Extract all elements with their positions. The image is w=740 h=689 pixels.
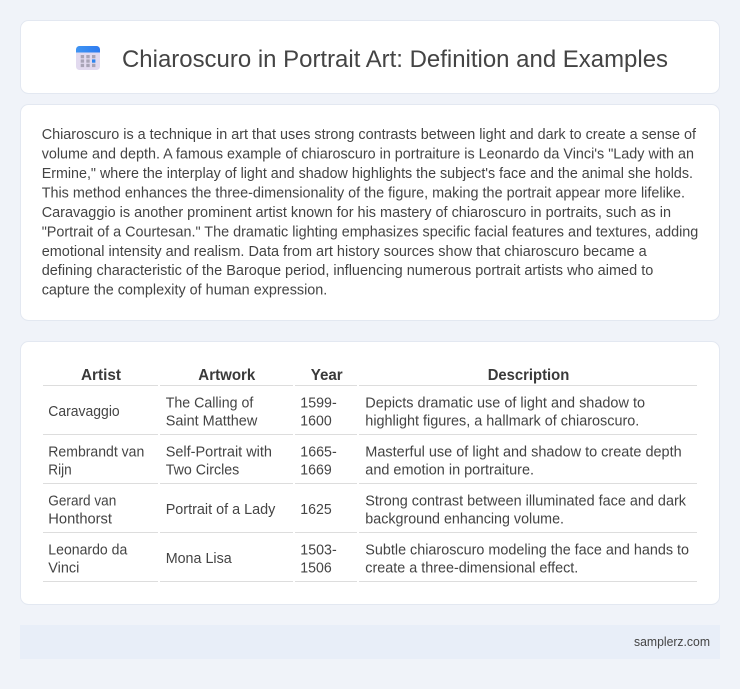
panel: introduction text <box>20 104 720 320</box>
footer bar <box>20 625 720 659</box>
table row: Rembrandt van Rijn: Self-Portrait with <box>166 444 272 460</box>
table row: Gerard van Honthorst <box>43 493 697 533</box>
table row: Leonardo da Vinci: 1506 <box>300 560 332 576</box>
table row: Rembrandt van Rijn: Two Circles <box>166 462 239 478</box>
panel: artists table <box>20 342 720 604</box>
table header row: Year <box>311 367 343 384</box>
table row: Rembrandt van Rijn <box>43 444 697 484</box>
table row: Gerard van Honthorst: Strong contrast between illuminated face and dark <box>365 493 687 509</box>
text block: description paragraph: Caravaggio is another prominent artist known for his mastery of chiaroscuro in portraits, such as in <box>42 204 671 221</box>
table row: Gerard van Honthorst: 1625 <box>300 502 332 518</box>
footer bar: samplerz.com <box>634 635 710 649</box>
table row: Leonardo da Vinci: create a three-dimensional effect. <box>365 560 578 576</box>
icon: calendar <box>76 46 100 70</box>
table row: Leonardo da Vinci <box>43 542 697 582</box>
table row: Leonardo da Vinci: Vinci <box>48 560 79 576</box>
table row: Gerard van Honthorst: Portrait of a Lady <box>166 502 276 518</box>
table row: Rembrandt van Rijn: Rijn <box>48 462 72 478</box>
table row: Caravaggio: The Calling of <box>166 395 254 411</box>
table row: Caravaggio: 1600 <box>300 413 332 429</box>
table row: Gerard van Honthorst: Honthorst <box>48 511 112 527</box>
text block: description paragraph: capture the complexity of human expression. <box>42 282 327 299</box>
text block: description paragraph: Chiaroscuro is a technique in art that uses strong contrasts between light and dark to create a sense of <box>42 126 697 143</box>
table row: Leonardo da Vinci: Subtle chiaroscuro modeling the face and hands to <box>365 542 689 558</box>
table header row: Description <box>488 367 569 384</box>
table header row: Artwork <box>198 367 255 384</box>
table row: Caravaggio: Caravaggio <box>48 404 120 420</box>
text block: description paragraph: emotional intensity and realism. Data from art history sources show that chiaroscuro became a <box>42 243 647 260</box>
text block: description paragraph <box>42 126 698 299</box>
table row: Rembrandt van Rijn: Masterful use of light and shadow to create depth <box>365 444 682 460</box>
table row: Leonardo da Vinci: 1503- <box>300 542 337 558</box>
text block: description paragraph: This method enhances the three-dimensionality of the figure, making the portrait appear more lifelike. <box>42 184 685 201</box>
table row: Gerard van Honthorst: Gerard van <box>48 493 116 509</box>
table row: Rembrandt van Rijn: 1669 <box>300 462 332 478</box>
title: Chiaroscuro in Portrait Art: Definition and Examples <box>122 46 668 73</box>
text block: description paragraph: defining characteristic of the Baroque period, influencing numerous portrait artists who aimed to <box>42 262 653 279</box>
table row: Rembrandt van Rijn: Rembrandt van <box>48 444 144 460</box>
table header row: Artist <box>81 367 122 384</box>
table row: Rembrandt van Rijn: 1665- <box>300 444 337 460</box>
table header row <box>43 367 697 386</box>
table row: Caravaggio: 1599- <box>300 395 337 411</box>
panel: title header <box>20 20 720 94</box>
table row: Leonardo da Vinci: Mona Lisa <box>166 551 233 567</box>
table row: Caravaggio: highlight figures, a hallmark of chiaroscuro. <box>365 413 639 429</box>
text block: description paragraph: Ermine," where the interplay of light and shadow highlights the subject's face and the animal she holds. <box>42 165 693 182</box>
table row: Caravaggio: Depicts dramatic use of light and shadow to <box>365 395 645 411</box>
table row: Rembrandt van Rijn: and emotion in portraiture. <box>365 462 534 478</box>
text block: description paragraph: volume and depth. A famous example of chiaroscuro in portraiture is Leonardo da Vinci's "Lady with an <box>42 145 694 162</box>
table row: Leonardo da Vinci: Leonardo da <box>48 542 128 558</box>
table row: Caravaggio: Saint Matthew <box>166 413 258 429</box>
table row: Gerard van Honthorst: background enhancing volume. <box>365 511 564 527</box>
text block: description paragraph: "Portrait of a Courtesan." The dramatic lighting emphasizes specific facial features and textures, adding <box>42 223 698 240</box>
table row: Caravaggio <box>43 395 697 435</box>
